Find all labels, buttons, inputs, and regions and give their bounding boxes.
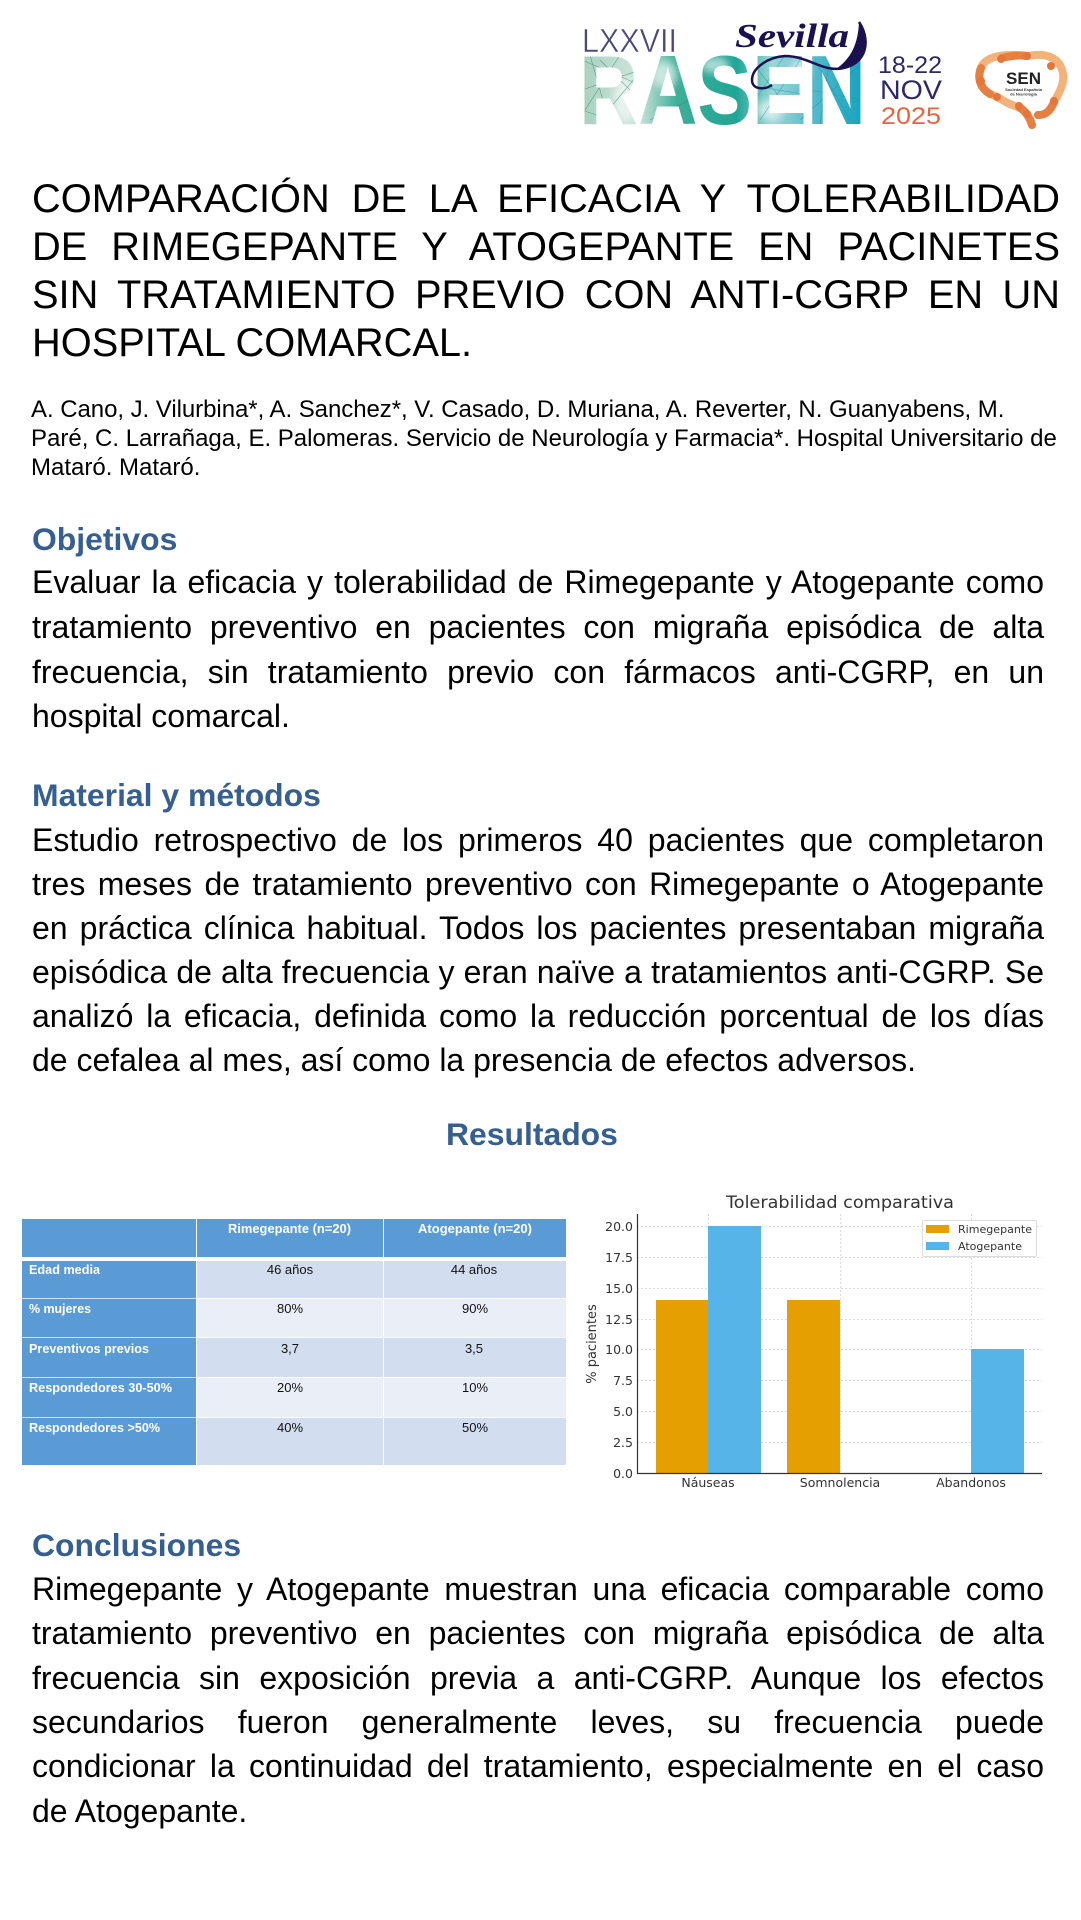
text: material y métodos: episódica de alta frecuencia y eran naïve a tratamientos anti-CGRP. Se [32,954,1044,990]
heading: Objetivos: Objetivos [32,521,177,557]
bar chart: tolerabilidad comparativa: 20.0 [605,1219,633,1234]
table: resultados: Preventivos previos [29,1341,149,1356]
logo: LXXVII RASEN Sevilla 18-22 NOV 2025: LXXVII [582,23,677,60]
table: resultados: Edad media [29,1262,101,1277]
bar chart: tolerabilidad comparativa: 17.5 [605,1250,633,1265]
table: resultados: Respondedores >50% [29,1420,160,1435]
logo: SEN brain: SEN [1006,69,1041,88]
bars: Atogepante [708,1226,1024,1473]
bars: Rimegepante [656,1300,840,1473]
logo: SEN brain [975,50,1068,129]
table: resultados: 44 años [451,1262,498,1277]
bar chart: tolerabilidad comparativa: Náuseas [681,1475,735,1490]
table: resultados: 50% [462,1420,488,1435]
bar chart: tolerabilidad comparativa: Abandonos [936,1475,1006,1490]
text: conclusiones: tratamiento preventivo en pacientes con migraña episódica de alta [32,1615,1044,1651]
logo: LXXVII RASEN Sevilla 18-22 NOV 2025: NOV [880,75,942,105]
bar chart: tolerabilidad comparativa: 12.5 [605,1312,633,1327]
table: resultados: 46 años [267,1262,314,1277]
authors [31,396,1057,481]
bar chart: tolerabilidad comparativa: 5.0 [613,1404,633,1419]
heading: Resultados: Resultados [446,1116,618,1152]
bar chart: tolerabilidad comparativa: 7.5 [613,1373,633,1388]
authors: Paré, C. Larrañaga, E. Palomeras. Servicio de Neurología y Farmacia*. Hospital Universitario de [31,425,1057,452]
bar chart: tolerabilidad comparativa: % pacientes [585,1304,600,1384]
text: material y métodos: en práctica clínica habitual. Todos los pacientes presentaban migraña [32,910,1044,946]
bar chart: tolerabilidad comparativa: Somnolencia [800,1475,880,1490]
text: material y métodos: Estudio retrospectivo de los primeros 40 pacientes que completaron [32,822,1044,858]
table: resultados: 3,7 [281,1341,299,1356]
table: resultados [22,1219,566,1465]
bar chart: tolerabilidad comparativa: 10.0 [605,1342,633,1357]
text: conclusiones: de Atogepante. [32,1793,247,1829]
bar chart: tolerabilidad comparativa [585,1193,1042,1490]
authors: Mataró. Mataró. [31,454,200,481]
text: conclusiones: Rimegepante y Atogepante muestran una eficacia comparable como [32,1571,1044,1607]
text: material y métodos: de cefalea al mes, así como la presencia de efectos adversos. [32,1042,916,1078]
legend: Atogepante [958,1241,1022,1253]
title [32,177,1060,365]
text: conclusiones: secundarios fueron generalmente leves, su frecuencia puede [32,1704,1044,1740]
logo: LXXVII RASEN Sevilla 18-22 NOV 2025: 18-22 [878,52,942,79]
table: resultados: 80% [277,1301,303,1316]
bar chart: tolerabilidad comparativa: 15.0 [605,1281,633,1296]
table: resultados: Respondedores 30-50% [29,1380,172,1395]
title: SIN TRATAMIENTO PREVIO CON ANTI-CGRP EN UN [32,273,1060,317]
bar chart: tolerabilidad comparativa: Tolerabilidad comparativa [725,1193,954,1212]
legend: Rimegepante [958,1224,1032,1236]
heading: Material y métodos: Material y métodos [32,777,321,813]
title: DE RIMEGEPANTE Y ATOGEPANTE EN PACINETES [32,225,1060,269]
heading: Conclusiones: Conclusiones [32,1527,241,1563]
text: conclusiones: frecuencia sin exposición previa a anti-CGRP. Aunque los efectos [32,1660,1044,1696]
text: objetivos: tratamiento preventivo en pacientes con migraña episódica de alta [32,609,1044,645]
table: resultados: 90% [462,1301,488,1316]
logo: SEN brain: Sociedad Española [1005,87,1043,92]
text: objetivos: hospital comarcal. [32,698,290,734]
logo: LXXVII RASEN Sevilla 18-22 NOV 2025: 2025 [881,103,941,130]
text: objetivos: Evaluar la eficacia y tolerabilidad de Rimegepante y Atogepante como [32,564,1044,600]
text: material y métodos: tres meses de tratamiento preventivo con Rimegepante o Atogepante [32,866,1044,902]
table: resultados: Rimegepante (n=20) [228,1221,351,1236]
text: conclusiones [32,1571,1044,1829]
table: resultados: 3,5 [465,1341,483,1356]
text: objetivos: frecuencia, sin tratamiento previo con fármacos anti-CGRP, en un [32,654,1044,690]
bar chart: tolerabilidad comparativa: 0.0 [613,1466,633,1481]
logo: SEN brain: de Neurología [1010,92,1038,96]
text: material y métodos: analizó la eficacia, definida como la reducción porcentual de los días [32,998,1044,1034]
title: HOSPITAL COMARCAL. [32,321,472,365]
table: resultados: 20% [277,1380,303,1395]
legend [922,1220,1036,1256]
logo: LXXVII RASEN Sevilla 18-22 NOV 2025: Sevilla [735,18,849,55]
text: conclusiones: condicionar la continuidad del tratamiento, especialmente en el caso [32,1748,1044,1784]
text: material y métodos [32,822,1044,1078]
table: resultados: Atogepante (n=20) [418,1221,532,1236]
title: COMPARACIÓN DE LA EFICACIA Y TOLERABILIDAD [32,177,1060,221]
logo: LXXVII RASEN Sevilla 18-22 NOV 2025: RASEN [579,35,866,145]
bar chart: tolerabilidad comparativa: 2.5 [613,1435,633,1450]
table: resultados: 40% [277,1420,303,1435]
table: resultados: 10% [462,1380,488,1395]
table: resultados: % mujeres [29,1301,91,1316]
text: objetivos [32,564,1044,734]
authors: A. Cano, J. Vilurbina*, A. Sanchez*, V. Casado, D. Muriana, A. Reverter, N. Guanyabens, M. [31,396,1004,423]
